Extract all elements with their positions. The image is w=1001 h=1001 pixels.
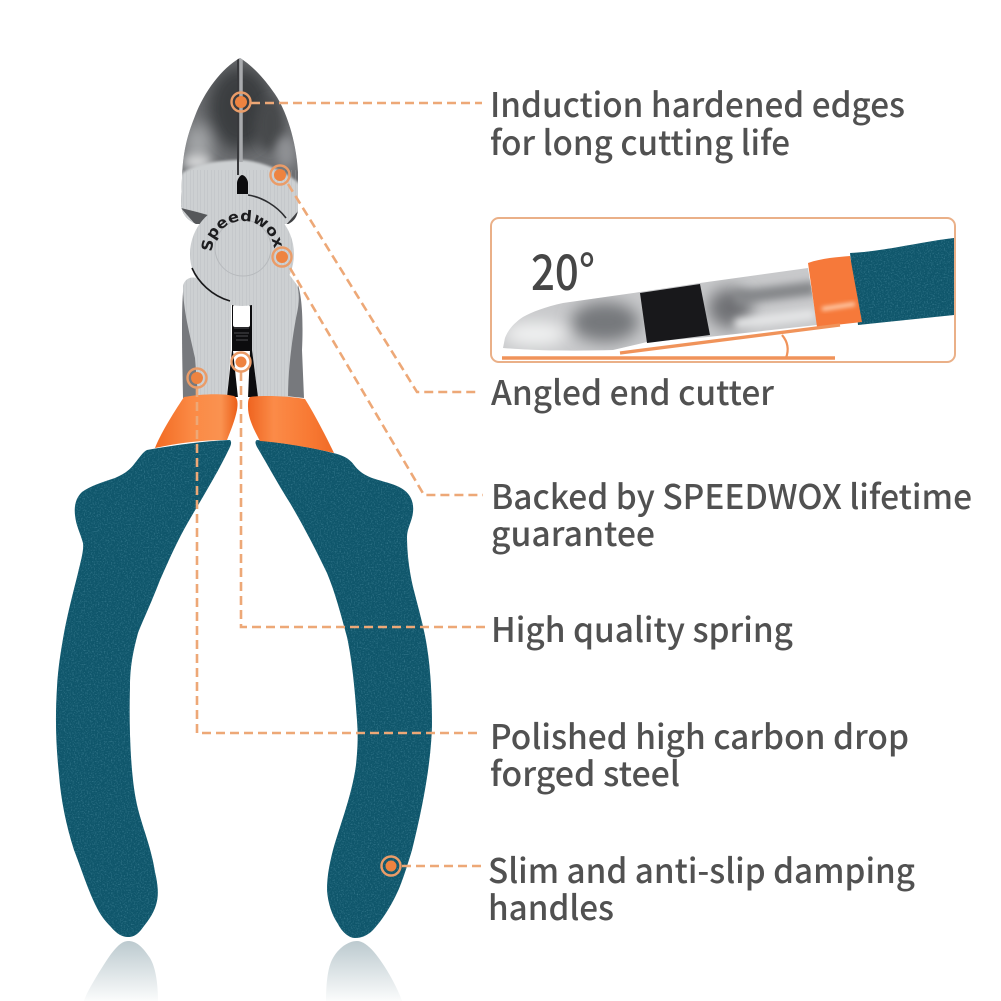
head slot bbox=[237, 175, 248, 194]
dark hardened band bbox=[208, 66, 272, 150]
pivot upper arc bbox=[248, 195, 286, 218]
shoulder shade bbox=[708, 288, 752, 328]
brand logo: Speedwox bbox=[202, 210, 282, 250]
text: anti-slip handles: handles bbox=[488, 881, 614, 930]
text: induction hardened edges: for long cutting life bbox=[490, 116, 790, 165]
cutter handle bbox=[850, 238, 954, 325]
marker: handle bbox=[382, 856, 400, 876]
spring coil bbox=[234, 328, 249, 340]
marker: steel bbox=[188, 368, 206, 388]
steel shade near block bbox=[571, 302, 639, 342]
panel: 20 degree angled end cutter bbox=[491, 218, 955, 362]
left shank grey side bbox=[182, 284, 200, 398]
pivot lower arc bbox=[192, 268, 230, 301]
marker: hardened edge bbox=[232, 92, 250, 112]
leader lines bbox=[197, 103, 485, 866]
shank brushing bbox=[183, 262, 299, 397]
head brushing bbox=[183, 170, 296, 180]
pivot brushing bbox=[190, 202, 294, 306]
pivot inner circle bbox=[215, 220, 271, 276]
right orange sleeve bbox=[248, 396, 334, 453]
marker: pivot guarantee bbox=[272, 248, 292, 266]
text: lifetime guarantee: guarantee bbox=[491, 507, 655, 556]
left bevel bbox=[182, 208, 208, 224]
right dark band bbox=[256, 99, 284, 151]
angle line bbox=[620, 325, 840, 353]
spring opening bbox=[233, 305, 250, 327]
shank highlight bbox=[735, 314, 815, 324]
steel base bbox=[503, 268, 817, 351]
tip highlight bbox=[503, 322, 567, 346]
text: polished steel: forged steel bbox=[490, 747, 680, 796]
cutter black block bbox=[640, 284, 710, 343]
baseline bbox=[502, 356, 835, 360]
text: lifetime guarantee: Backed by SPEEDWOX lifetime bbox=[491, 470, 972, 519]
text: angled end cutter: Angled end cutter bbox=[491, 366, 774, 415]
marker: end cutter bbox=[270, 166, 290, 184]
panel frame bbox=[491, 218, 955, 362]
shank shade bbox=[735, 288, 815, 298]
sleeve highlight bbox=[822, 304, 855, 309]
marker: spring bbox=[232, 352, 250, 372]
right shank silver bbox=[232, 262, 299, 397]
left highlight on blade bbox=[185, 123, 211, 167]
right bevel bbox=[286, 211, 298, 224]
text: high quality spring: High quality spring bbox=[491, 603, 793, 652]
cutting head bbox=[181, 58, 298, 224]
left orange sleeve bbox=[155, 394, 238, 448]
right lower highlight bbox=[276, 136, 296, 168]
left handle grip bbox=[56, 440, 231, 937]
brand arc path bbox=[212, 221, 274, 252]
central ridge bbox=[239, 58, 243, 162]
head base steel bbox=[181, 58, 298, 224]
cutter steel bbox=[503, 268, 817, 351]
right handle grip bbox=[256, 440, 432, 938]
text: anti-slip handles: Slim and anti-slip damping bbox=[488, 844, 915, 893]
gap between the shanks bbox=[233, 351, 250, 398]
black spring slot bbox=[227, 302, 258, 397]
lower silver face bbox=[178, 160, 300, 226]
left shank silver bbox=[183, 277, 231, 397]
text: polished steel: Polished high carbon drop bbox=[490, 710, 909, 759]
text: induction hardened edges: Induction hardened edges bbox=[490, 78, 905, 127]
left lower highlight bbox=[183, 155, 211, 169]
pivot disc bbox=[190, 202, 294, 306]
ridge shadow bbox=[237, 58, 239, 175]
angle value: 20° bbox=[531, 234, 595, 305]
handle reflections bbox=[84, 941, 402, 1001]
cutter orange sleeve bbox=[808, 256, 862, 327]
pliers bbox=[56, 58, 432, 938]
angle arc bbox=[782, 335, 788, 358]
right shank grey side bbox=[285, 285, 304, 398]
